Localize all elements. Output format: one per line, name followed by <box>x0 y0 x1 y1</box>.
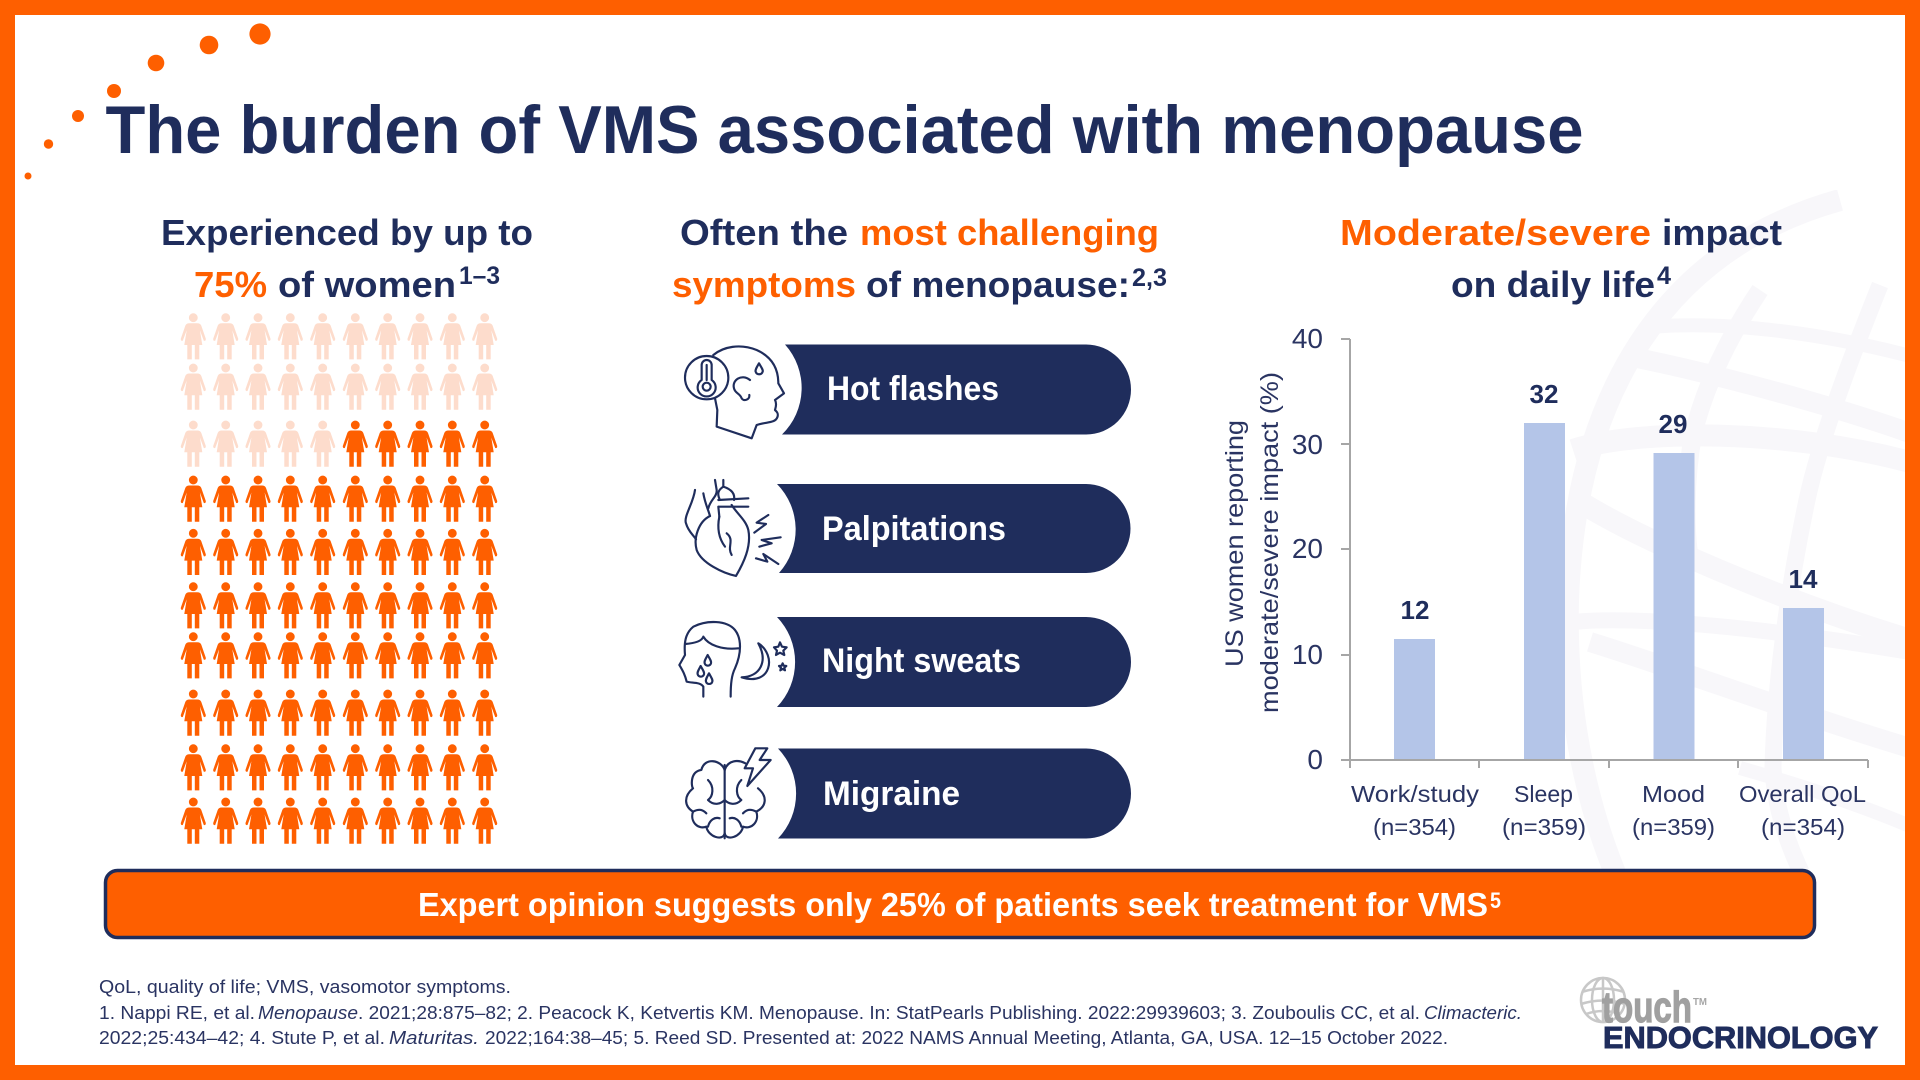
category labels: (n=359) <box>1502 814 1586 840</box>
heading: symptoms <box>672 212 1167 305</box>
heading: impact: 4 <box>1657 262 1671 290</box>
footnotes and references: . 2021;28:875–82; 2. Peacock K, Ketvertis KM. Menopause. In: StatPearls Publishing. 2022:29939603; 3. Zouboulis CC, et al. <box>358 1002 1420 1023</box>
heading: symptoms: of menopause: <box>866 264 1130 305</box>
icon: heart with shocks <box>686 480 781 576</box>
symptom: migraine <box>686 748 1131 838</box>
y axis labels: 40 <box>1292 323 1323 354</box>
y axis labels <box>1292 323 1323 775</box>
category labels: Mood <box>1642 781 1705 807</box>
y axis labels: 10 <box>1292 639 1323 670</box>
symptom: night sweats <box>679 617 1131 707</box>
y axis title: US women reporting <box>1221 420 1249 667</box>
footnotes and references: Menopause <box>258 1002 358 1023</box>
heading: impact <box>1340 212 1782 305</box>
decorative dot arc <box>24 23 271 180</box>
heading: prevalence: of women <box>278 264 456 305</box>
heading: prevalence: 75% <box>194 264 267 305</box>
heading: symptoms: Often the <box>680 212 848 253</box>
heading: symptoms: symptoms <box>672 264 856 305</box>
category labels: Sleep <box>1514 781 1573 807</box>
footnotes and references: 2022;164:38–45; 5. Reed SD. Presented at: 2022 NAMS Annual Meeting, Atlanta, GA, USA. 12–15 October 2022. <box>485 1027 1448 1048</box>
heading: impact: on daily life <box>1451 264 1655 305</box>
logo: touch endocrinology: ENDOCRINOLOGY <box>1603 1020 1878 1055</box>
footnotes and references: Climacteric. <box>1424 1002 1522 1023</box>
icon: sweating head and moon <box>679 622 787 697</box>
watermark globe <box>1572 318 1902 784</box>
category labels: (n=354) <box>1373 814 1456 840</box>
category labels <box>1351 781 1866 840</box>
footnotes and references: 1. Nappi RE, et al. <box>99 1002 255 1023</box>
icon: head with thermometer <box>685 346 784 438</box>
y axis title: moderate/severe impact (%) <box>1256 372 1284 713</box>
bar values: 29 <box>1659 409 1687 439</box>
symptom: palpitations <box>686 480 1130 576</box>
category labels: Work/study <box>1351 781 1479 807</box>
axes <box>1341 339 1868 768</box>
bar values <box>1401 379 1818 625</box>
bar values: 32 <box>1530 379 1558 409</box>
bar values: 12 <box>1401 595 1429 625</box>
category labels: (n=354) <box>1761 814 1845 840</box>
bars <box>1394 423 1824 760</box>
logo: touch endocrinology: TM <box>1693 997 1707 1008</box>
callout banner: Expert opinion suggests only 25% of patients seek treatment for VMS <box>418 886 1488 923</box>
logo: touch endocrinology: touch <box>1602 983 1692 1032</box>
symptom: palpitations: Palpitations <box>822 510 1006 548</box>
symptom: hot flashes: Hot flashes <box>827 370 999 408</box>
heading: prevalence <box>161 212 533 305</box>
heading: impact: impact <box>1662 212 1782 253</box>
pictogram: 75 of 100 women <box>181 313 497 844</box>
heading: prevalence: 1–3 <box>459 262 500 290</box>
callout banner: 5 <box>1490 888 1501 913</box>
bar chart: daily life impact <box>1221 323 1868 840</box>
symptom: migraine: Migraine <box>823 775 960 813</box>
category labels: (n=359) <box>1632 814 1715 840</box>
footnotes and references: QoL, quality of life; VMS, vasomotor symptoms. <box>99 976 511 997</box>
footnotes and references: 2022;25:434–42; 4. Stute P, et al. <box>99 1027 385 1048</box>
heading: prevalence: Experienced by up to <box>161 212 533 253</box>
footnotes and references: Maturitas. <box>389 1027 479 1048</box>
symptom: hot flashes <box>685 344 1131 438</box>
logo globe <box>1581 978 1625 1022</box>
logo: touch endocrinology <box>1581 978 1878 1055</box>
y axis labels: 0 <box>1307 744 1323 775</box>
category labels: Overall QoL <box>1739 781 1866 807</box>
heading: symptoms: 2,3 <box>1132 264 1167 292</box>
heading: symptoms: most challenging <box>860 212 1159 253</box>
bar values: 14 <box>1789 564 1818 594</box>
footnotes and references <box>99 976 1522 1048</box>
callout banner <box>106 870 1814 938</box>
y axis labels: 30 <box>1292 429 1323 460</box>
title: The burden of VMS associated with menopause <box>106 92 1584 168</box>
heading: impact: Moderate/severe <box>1340 212 1651 253</box>
symptom: night sweats: Night sweats <box>822 642 1021 680</box>
icon: brain with lightning <box>686 748 771 838</box>
y axis title <box>1221 372 1284 713</box>
y axis labels: 20 <box>1292 533 1323 564</box>
